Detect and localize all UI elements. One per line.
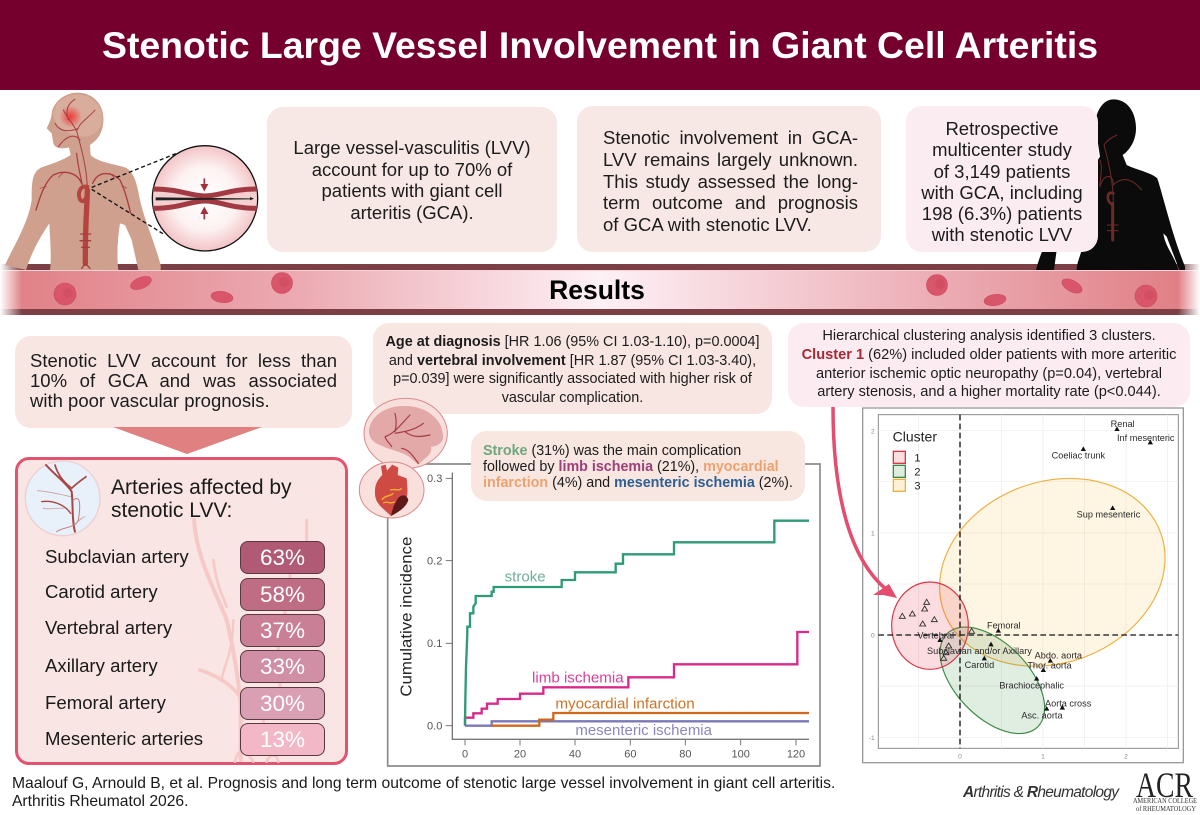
value [240,650,325,683]
cluster 1 ellipse [892,582,968,669]
value [240,578,325,611]
axis labels: -1 [869,735,875,742]
artery labels: Sup mesenteric [1077,509,1141,519]
y axis title: Cumulative incidence [399,536,416,697]
value [240,723,325,756]
text: LVV background [293,137,531,223]
text: main finding: with poor vascular prognosis. [30,390,270,411]
body silhouette [5,93,161,270]
text: study aim [603,127,858,235]
label: Carotid artery [45,581,158,602]
artery labels: Abdo. aorta [1035,650,1083,660]
row: Femoral artery [45,687,325,720]
text: study design: 198 (6.3%) patients [922,203,1082,224]
panel frame [15,457,348,765]
tick labels: 40 [569,749,581,761]
legend: 1 [914,453,920,465]
text: study aim: This study assessed the long- [603,171,858,192]
arteries [36,99,131,268]
text: study design: with stenotic LVV [932,224,1072,245]
label: Axillary artery [45,655,158,676]
text: main finding: 10% of GCA and was associated [30,370,337,391]
curve: stroke [465,521,809,726]
panel: clustering [788,323,1190,407]
value: 13% [260,727,305,752]
stenosis lens [152,146,258,251]
text: study aim: LVV remains largely unknown. [603,149,858,170]
curve labels: stroke [505,570,546,586]
value: 63% [260,545,305,570]
legend: 3 [914,481,920,493]
text: complications: infarction (4%) and mesenteric ischemia (2%). [483,475,793,491]
heading: Results: Results [549,275,645,305]
value [240,541,325,574]
legend: 2 [914,467,920,479]
tick labels: 100 [731,749,750,761]
curve: myocardial infarction [492,713,809,726]
text: main finding: Stenotic LVV account for less than [30,350,337,371]
artery labels: Vertebral [917,631,954,641]
curve labels: limb ischemia [532,670,625,686]
value [240,614,325,647]
axis labels: 1 [871,531,875,538]
curve: limb ischemia [465,632,809,726]
temporal inflammation glow [59,105,82,128]
text: complications: followed by limb ischemia (21%), myocardial [483,459,779,475]
text: study aim: of GCA with stenotic LVV. [603,214,812,235]
heading: arteries affected: Arteries affected by [111,476,292,499]
value: 33% [260,654,305,679]
artery labels: Asc. aorta [1021,710,1063,720]
axis labels: 2 [871,428,875,435]
value: 30% [260,691,305,716]
text: LVV background: patients with giant cell [322,180,502,201]
artery labels: Aorta cross [1045,698,1092,708]
axis labels: 2 [1124,753,1128,760]
label: Femoral artery [45,692,166,713]
text: clustering: artery stenosis, and a higher mortality rate (p<0.044). [817,384,1161,400]
filled triangles: arteries [937,426,1153,711]
illustration: human body with arteries and stenosis lens [5,92,258,270]
heading: arteries affected [111,476,292,522]
tick labels: 0.0 [427,720,442,732]
chart frame [388,464,820,766]
panel: LVV background [267,107,557,252]
cluster 2 ellipse [921,608,1064,753]
value [240,687,325,720]
text: risk factors: p=0.039] were significantly associated with higher risk of [393,371,752,387]
cluster 3 ellipse [913,448,1192,697]
row: Axillary artery [45,650,325,683]
panel: main finding [15,336,352,428]
artery labels: Renal [1111,419,1135,429]
legend: Cluster [893,429,937,445]
hollow triangles: patient variables [899,599,975,660]
citation [12,775,835,810]
tick labels: 60 [624,749,636,761]
text: complications: Stroke (31%) was the main complication [483,443,741,459]
axis labels: 1 [1041,753,1045,760]
axis labels: 0 [958,753,962,760]
tick labels: 0.2 [427,555,442,567]
logos: Arthritis & Rheumatology and ACR: Arthritis & Rheumatology [962,784,1120,801]
text: risk factors [386,334,759,406]
text: study design [921,118,1083,245]
brain outline on head [53,95,102,137]
label: Mesenteric arteries [45,728,203,749]
row: Carotid artery [45,578,325,611]
plot panel [878,415,1178,748]
icon: heart [358,462,424,518]
legend [893,429,937,493]
panel: arteries affected [15,457,416,765]
text: study design: with GCA, including [921,182,1083,203]
axis labels: 0 [871,633,875,640]
artery labels: Thor. aorta [1027,661,1073,671]
tick labels: 120 [787,749,805,761]
curve labels: mesenteric ischemia [575,723,713,739]
text: study aim: Stenotic involvement in GCA- [603,127,858,148]
tick labels: 0 [462,749,468,761]
tick labels: 0.1 [427,638,442,650]
text: clustering: Cluster 1 (62%) included older patients with more arteritic [802,347,1176,363]
zero lines [878,415,1178,748]
curve: mesenteric ischemia [465,721,809,726]
outer frame [863,408,1183,763]
row: Mesenteric arteries [45,723,325,756]
heading: arteries affected: stenotic LVV: [111,498,232,522]
logos: Arthritis & Rheumatology and ACR: of RHEUMATOLOGY [1136,805,1196,813]
label: Vertebral artery [45,617,172,638]
artery labels: Brachiocephalic [999,680,1064,690]
tick labels: 0.3 [427,473,442,485]
curve labels: myocardial infarction [555,696,695,712]
text: clustering [802,328,1176,400]
results band: blood vessel [1,264,1199,315]
artery labels: Inf mesenteric [1117,433,1175,443]
chart: cumulative incidence of complications [386,463,821,767]
dashed zoom lines [92,153,177,235]
illustration: black body silhouette with arteries [1036,99,1185,270]
artery labels: Carotid [965,660,994,670]
citation: Arthritis Rheumatol 2026. [12,793,188,810]
title banner [0,0,1200,90]
text: risk factors: and vertebral involvement [HR 1.87 (95% CI 1.03-3.40), [389,353,756,369]
artery labels: Coeliac trunk [1052,451,1106,461]
artery labels [917,419,1175,720]
label: Subclavian artery [45,546,189,567]
citation: Maalouf G, Arnould B, et al. Prognosis and long term outcome of stenotic large vessel involvement in giant cell arteritis. [12,775,835,792]
text: study design: multicenter study [932,139,1072,160]
text: LVV background: Large vessel-vasculitis (LVV) [293,137,531,158]
text: study design: Retrospective [945,118,1059,139]
panel: study design [906,106,1098,252]
text: main finding [30,350,337,411]
panel: study aim [577,106,881,252]
text: clustering: Hierarchical clustering analysis identified 3 clusters. [822,328,1156,344]
tick labels: 20 [514,749,526,761]
curve labels [505,570,713,739]
row: Vertebral artery [45,614,325,647]
silhouette arteries [1100,135,1142,240]
panel: complications [471,431,805,501]
row: Subclavian artery [45,541,325,574]
icon: artery branches in circle and faint background arteries [24,460,416,764]
text: complications [483,443,793,491]
title banner: Stenotic Large Vessel Involvement in Giant Cell Arteritis [102,24,1098,66]
value: 37% [260,618,305,643]
text: study design: of 3,149 patients [934,161,1070,182]
tick labels: 80 [679,749,691,761]
chart: cluster scatter plot [862,407,1184,764]
text: risk factors: vascular complication. [502,390,643,406]
axes [452,473,809,739]
axis labels [869,428,1128,760]
icon: brain [364,398,448,468]
artery labels: Subclavian and/or Axillary [927,646,1032,656]
panel: risk factors [373,323,772,414]
artery labels: Femoral [987,621,1021,631]
text: LVV background: arteritis (GCA). [350,202,474,223]
text: study aim: term outcome and prognosis [603,192,858,213]
text: LVV background: account for up to 70% of [312,159,512,180]
value: 58% [260,582,305,607]
text: risk factors: Age at diagnosis [HR 1.06 (95% CI 1.03-1.10), p=0.0004] [386,334,759,350]
ticks [446,478,796,745]
text: clustering: anterior ischemic optic neuropathy (p=0.04), vertebral [816,366,1162,382]
tick labels [427,473,805,761]
